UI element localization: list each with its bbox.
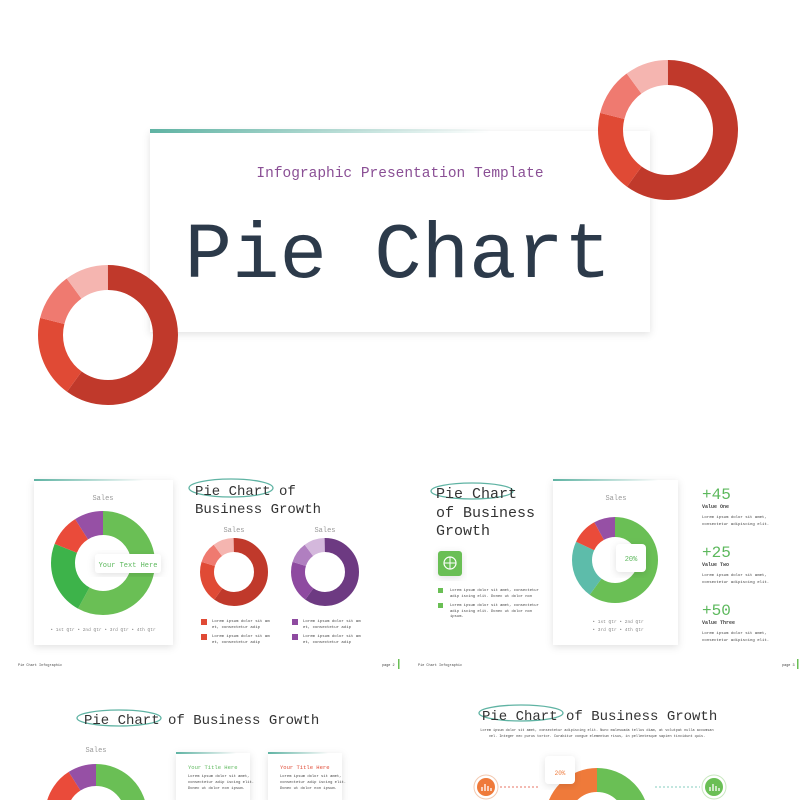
chart	[56, 747, 136, 800]
heading: Pie Chart of Business Growth	[84, 713, 319, 729]
small donuts: Sales	[314, 527, 336, 535]
stats	[702, 486, 769, 643]
heading	[189, 479, 321, 518]
heading: vel. Integer nec purus tortor. Curabitur congue elementum risus, in pellentesque sapien tincidunt quis.	[489, 734, 705, 739]
chart card: Your Text Here	[99, 562, 157, 570]
stats: +50	[702, 602, 731, 620]
cards: Donec ut dolor non ipsum.	[188, 786, 245, 791]
main title: Pie Chart	[185, 211, 611, 301]
chart card: • 1st Qtr • 2nd Qtr	[592, 619, 644, 625]
bullets: Lorem ipsum dolor sit amet, consectetur	[450, 603, 539, 608]
chart: Sales	[85, 747, 107, 755]
bullets: adip iscing elit. Donec ut dolor non	[450, 609, 532, 614]
bullets: Lorem ipsum dolor sit am	[212, 634, 270, 639]
stats: consectetur adipiscing elit.	[702, 522, 769, 527]
footer: Pie Chart Infographic	[18, 663, 62, 668]
stats: Value One	[702, 504, 729, 510]
cards: Lorem ipsum dolor sit amet,	[188, 774, 250, 779]
cards: Donec ut dolor non ipsum.	[280, 786, 337, 791]
footer: page 2	[382, 664, 395, 668]
icon: green chart	[702, 775, 726, 799]
chart card	[34, 479, 173, 645]
stats: Lorem ipsum dolor sit amet,	[702, 573, 767, 578]
footer	[418, 659, 798, 669]
stats: +25	[702, 544, 731, 562]
footer	[18, 659, 400, 669]
icon: globe	[438, 551, 462, 576]
stats: +45	[702, 486, 731, 504]
bullets	[438, 588, 539, 619]
heading: Pie Chart	[436, 486, 517, 503]
title card	[150, 129, 650, 332]
bullets: adip iscing elit. Donec ut dolor non	[450, 594, 532, 599]
stats: Lorem ipsum dolor sit amet,	[702, 515, 767, 520]
bullets: ipsum.	[450, 614, 464, 619]
heading: Lorem ipsum dolor sit amet, consectetur adipiscing elit. Nunc malesuada tellus diam, at volutpat nulla accumsan	[480, 728, 714, 733]
stats: Value Three	[702, 620, 735, 626]
chart	[545, 756, 637, 800]
chart card: Sales	[605, 495, 627, 503]
bullets: et, consectetur adip	[303, 625, 352, 630]
slide 2 preview	[18, 479, 400, 669]
heading	[479, 705, 717, 739]
cards	[176, 752, 346, 800]
heading	[431, 483, 535, 540]
donut: top right	[610, 72, 726, 188]
stats: Value Two	[702, 562, 729, 568]
chart: 20%	[555, 770, 566, 777]
cards: consectetur adip iscing elit.	[188, 780, 254, 785]
small donuts: Sales	[223, 527, 245, 535]
icon: orange chart	[474, 775, 498, 799]
heading: Growth	[436, 523, 490, 540]
heading: Pie Chart of	[195, 484, 296, 500]
heading: Business Growth	[195, 502, 321, 518]
cards: Lorem ipsum dolor sit amet,	[280, 774, 342, 779]
bullets: Lorem ipsum dolor sit am	[303, 634, 361, 639]
slide 5 preview	[474, 705, 726, 800]
chart card: • 3rd Qtr • 4th Qtr	[592, 627, 644, 633]
heading: of Business	[436, 505, 535, 522]
chart card: • 1st Qtr • 2nd Qtr • 3rd Qtr • 4th Qtr	[50, 627, 156, 633]
stats: Lorem ipsum dolor sit amet,	[702, 631, 767, 636]
chart card: 20%	[625, 556, 638, 564]
bullets: et, consectetur adip	[303, 640, 352, 645]
heading: Pie Chart of Business Growth	[482, 709, 717, 725]
small donuts	[207, 527, 352, 599]
donut: left	[50, 278, 166, 392]
subtitle: Infographic Presentation Template	[256, 166, 544, 182]
bullets	[201, 619, 361, 645]
bullets: et, consectetur adip	[212, 640, 261, 645]
cards: Your Title Here	[188, 764, 238, 771]
chart card: Sales	[92, 495, 114, 503]
cards: consectetur adip iscing elit.	[280, 780, 346, 785]
slide 4 preview	[56, 710, 346, 800]
slide 3 preview	[418, 479, 798, 669]
footer: Pie Chart Infographic	[418, 663, 462, 668]
bullets: et, consectetur adip	[212, 625, 261, 630]
bullets: Lorem ipsum dolor sit amet, consectetur	[450, 588, 539, 593]
chart card	[553, 479, 678, 645]
footer: page 3	[782, 664, 795, 668]
cards: Your Title Here	[280, 764, 330, 771]
stats: consectetur adipiscing elit.	[702, 580, 769, 585]
bullets: Lorem ipsum dolor sit am	[212, 619, 270, 624]
bullets: Lorem ipsum dolor sit am	[303, 619, 361, 624]
stats: consectetur adipiscing elit.	[702, 638, 769, 643]
